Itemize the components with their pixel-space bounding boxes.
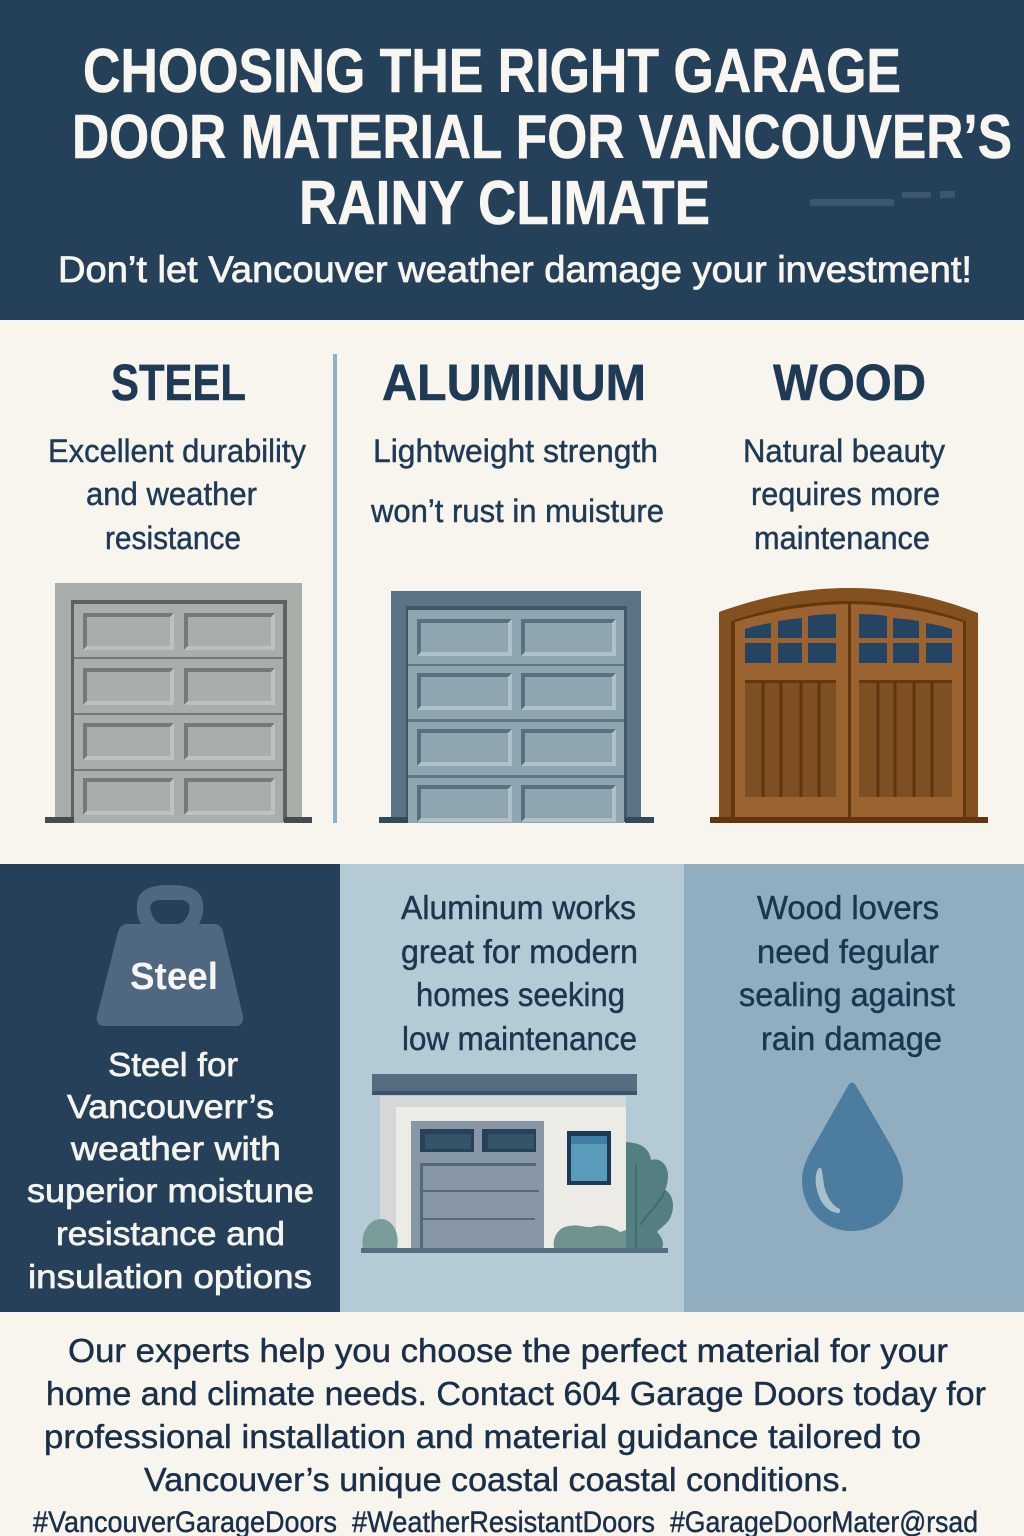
divider [333,354,337,823]
icon: modern house with garage [361,1074,673,1253]
subtitle: Don’t let Vancouver weather damage your investment! [58,249,972,290]
steel callout text: superior moistune [27,1172,314,1209]
heading: steel: STEEL [111,354,246,411]
aluminum callout text: great for modern [401,933,638,970]
steel description: resistance [105,520,241,556]
wood callout text: rain damage [761,1020,942,1057]
call to action text: professional installation and material guidance tailored to [44,1418,921,1455]
icon: steel weight [97,885,243,1026]
icon: wood garage door [710,588,988,823]
steel callout text: weather with [70,1130,281,1167]
wood callout text: need fegular [757,933,939,970]
panel: wood callout [684,864,1024,1312]
panel: steel column [45,354,312,823]
call to action text: Vancouver’s unique coastal coastal conditions. [144,1461,849,1498]
aluminum callout text: low maintenance [402,1020,637,1057]
steel callout text: resistance and [56,1215,285,1252]
icon: aluminum garage door [379,591,654,823]
steel callout text: Vancouverr’s [67,1088,274,1125]
steel callout text [27,1046,314,1295]
wood description: Natural beauty [743,433,945,469]
steel description: Excellent durability [48,433,306,469]
wood callout text [739,889,955,1057]
wood callout text: sealing against [739,976,955,1013]
steel callout text: insulation options [28,1258,312,1295]
heading: wood: WOOD [773,354,926,411]
steel description: and weather [86,476,257,512]
wood description [743,433,945,556]
icon: water drop [802,1082,903,1231]
hashtags [33,1506,978,1536]
aluminum callout text: Aluminum works [401,889,636,926]
wood description: requires more [751,476,940,512]
panel: wood column [710,354,988,823]
aluminum description: won’t rust in muisture [370,493,664,529]
title [72,37,1012,238]
panel: aluminum callout [340,864,684,1312]
wood description: maintenance [754,520,930,556]
header banner [0,0,1024,320]
call to action text [44,1332,986,1498]
panel: steel callout [0,864,340,1312]
steel callout text: Steel for [108,1046,238,1083]
aluminum callout text: homes seeking [416,976,625,1013]
wood callout text: Wood lovers [757,889,939,926]
call to action text: Our experts help you choose the perfect material for your [68,1332,948,1369]
aluminum callout text [401,889,638,1057]
title: RAINY CLIMATE [299,169,710,238]
steel description [48,433,306,556]
heading: aluminum: ALUMINUM [382,354,646,411]
panel: aluminum column [370,354,664,823]
call to action text: home and climate needs. Contact 604 Garage Doors today for [46,1375,986,1412]
aluminum description: Lightweight strength [373,433,658,469]
aluminum description [370,433,664,529]
icon: steel weight: Steel [130,956,218,998]
icon: steel garage door [45,583,312,823]
